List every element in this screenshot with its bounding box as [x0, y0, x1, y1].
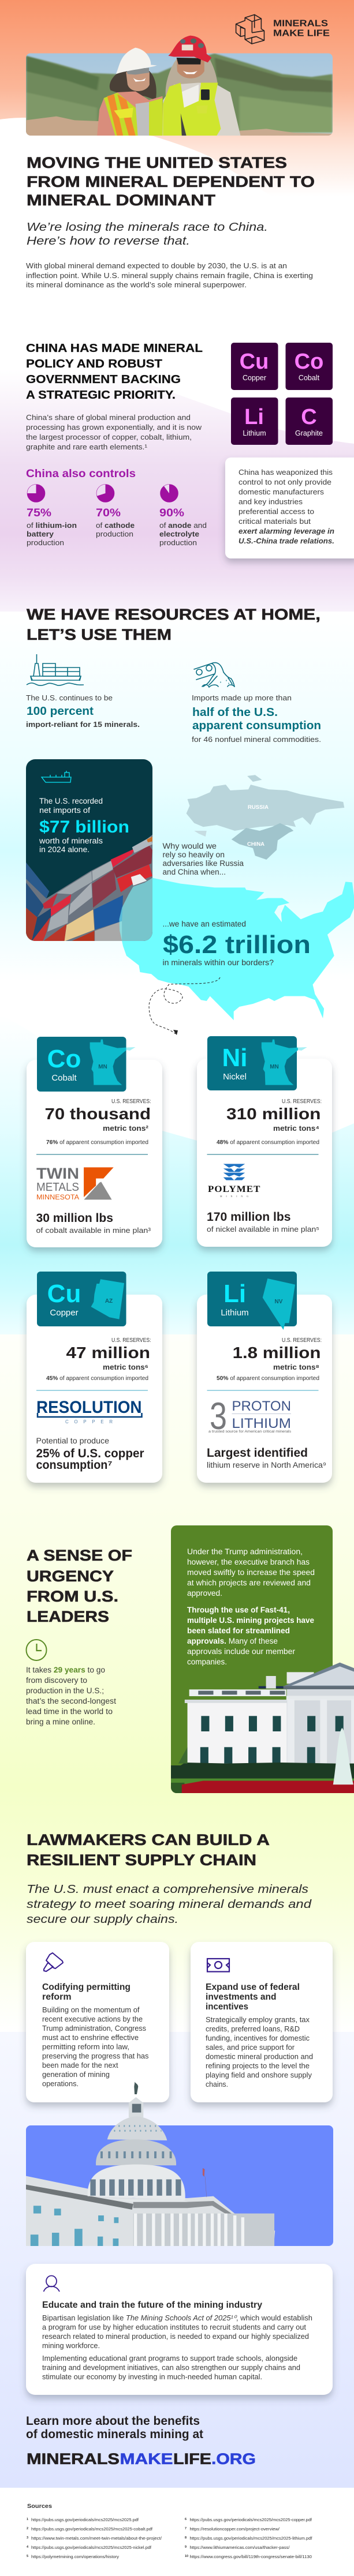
- badge: lithium Nevada: Lithium: [221, 1308, 249, 1318]
- title: FROM MINERAL DEPENDENT TO: [27, 173, 315, 190]
- sources list: left column: https://pubs.usgs.gov/periodicals/mcs2025/mcs2025-cobalt.pdf: [31, 2526, 153, 2532]
- stat: 100 percent import-reliant: [26, 693, 140, 729]
- stat: 90% anode and electrolyte: production: [159, 538, 197, 547]
- China body text: [26, 413, 202, 451]
- sources list: left column: https://www.twin-metals.com/meet-twin-metals/about-the-project/: [31, 2536, 162, 2541]
- title: [27, 154, 315, 209]
- card: codifying permitting reform: operations.: [42, 2080, 79, 2088]
- card: codifying permitting reform: Trump administration, Congress: [42, 2024, 146, 2033]
- map: Russia and China: [187, 775, 344, 860]
- reserves: 310 million metric tons: 48% of apparent consumption imported: [217, 1139, 319, 1146]
- stat: 70% cathode: production: [96, 530, 133, 538]
- intro text: inflection point. While U.S. mineral supply chains remain fragile, China is exerting: [26, 271, 313, 280]
- intro text: [26, 261, 313, 289]
- website URL: [27, 2450, 256, 2468]
- card: nickel: [197, 1036, 332, 1247]
- card: codifying permitting reform: preserving the progress that has: [42, 2052, 149, 2060]
- badge: copper Arizona: Cu: [47, 1280, 81, 1308]
- card: educate and train: stimulate our economy by investing in much-needed human capital.: [42, 2373, 262, 2381]
- text: 29 years to go from discovery to production: It takes 29 years to go: [26, 1666, 105, 1674]
- tile: graphite: C: [301, 405, 317, 429]
- reserves: 47 million metric tons: 47 million: [66, 1344, 150, 1362]
- card: cobalt: [27, 1037, 162, 1247]
- China body text: the largest processor of copper, cobalt, lithium,: [26, 433, 192, 441]
- logo: Twin Metals Minnesota: METALS: [36, 1181, 79, 1194]
- logo wordmark: MINERALS: [273, 18, 328, 29]
- badge: cobalt Minnesota: Cobalt: [51, 1073, 77, 1083]
- card: educate and train: a program for use by higher education institutes to recruit students and carry out: [42, 2323, 307, 2331]
- logo: PolyMet Mining: MINING: [220, 1195, 248, 1198]
- tile: copper: Cu: [240, 350, 269, 374]
- badge: nickel Minnesota: Nickel: [223, 1072, 247, 1082]
- reserves: 1.8 million metric tons: U.S. RESERVES:: [282, 1337, 322, 1344]
- heading: a sense of urgency: FROM U.S.: [27, 1588, 118, 1605]
- map: United States: [119, 878, 354, 1020]
- card: federal investments and incentives: sales, and price support for: [206, 2043, 295, 2052]
- text: why rely on adversaries: and China when...: [163, 868, 226, 876]
- sources list: left column: 4: [27, 2545, 29, 2549]
- pie chart 90%: [161, 485, 178, 503]
- text: 29 years to go from discovery to production: [26, 1666, 116, 1726]
- callout: China weaponized control: [225, 458, 354, 558]
- intro text: its mineral dominance as the world’s sole mineral superpower.: [26, 280, 247, 289]
- sources list: right column: 8: [185, 2536, 187, 2540]
- sources list: right column: [185, 2517, 312, 2559]
- map: China silhouette: [232, 823, 293, 860]
- reserves: 70 thousand metric tons: 70 thousand: [45, 1105, 151, 1123]
- sources list: right column: https://resolutioncopper.com/project-overview/: [189, 2526, 280, 2532]
- card: lithium: [197, 1272, 332, 1483]
- card: federal investments and incentives: credits, preferred loans, R&D: [206, 2025, 300, 2033]
- logo: PolyMet Mining: POLYMET: [208, 1184, 261, 1194]
- callout: China weaponized control: exert alarming leverage in: [239, 527, 334, 535]
- sources list: left column: https://polymetmining.com/operations/history: [31, 2554, 119, 2559]
- heading: resources at home: LET’S USE THEM: [27, 626, 172, 643]
- sources list: right column: 9: [185, 2545, 187, 2549]
- heading: a sense of urgency: [27, 1547, 132, 1625]
- stat: 100 percent import-reliant: import-reliant for 15 minerals.: [26, 720, 140, 729]
- icon: mining machine: [194, 663, 234, 687]
- stat: half of apparent consumption: [192, 693, 321, 744]
- logo: Twin Metals Minnesota: TWIN: [36, 1165, 79, 1182]
- subheading: comprehensive minerals strategy: [27, 1883, 312, 1926]
- blue panel: [26, 2125, 333, 2246]
- card: federal investments and incentives: investments and: [206, 1992, 276, 2002]
- image: U.S. Capitol: [26, 2082, 275, 2247]
- badge: nickel Minnesota: MN: [270, 1064, 279, 1070]
- subheading: comprehensive minerals strategy: The U.S. must enact a comprehensive minerals: [27, 1883, 308, 1896]
- tile: cobalt: [285, 343, 333, 390]
- green panel: Trump administration: however, the executive branch has: [187, 1558, 310, 1566]
- stat: $6.2 trillion: [163, 920, 311, 967]
- sources list: left column: [27, 2517, 162, 2559]
- stat: half of apparent consumption: apparent consumption: [192, 719, 321, 732]
- green panel: Trump administration: approved.: [187, 1589, 222, 1598]
- logo wordmark: [273, 18, 330, 38]
- reserves: 70 thousand metric tons: metric tons²: [103, 1124, 149, 1133]
- reserves: 47 million metric tons: metric tons⁶: [103, 1363, 148, 1371]
- badge: nickel Minnesota: [207, 1036, 307, 1090]
- green panel: Trump administration: multiple U.S. mining projects have: [187, 1616, 314, 1625]
- logo: Twin Metals Minnesota: [36, 1165, 114, 1201]
- stat: 25% of U.S. copper consumption: 25% of U.S. copper: [36, 1447, 144, 1460]
- sources list: left column: 3: [27, 2536, 28, 2540]
- sources list: right column: https://www.lithiumamericas.com/usa/thacker-pass/: [189, 2545, 290, 2550]
- stat: 25% of U.S. copper consumption: [36, 1436, 144, 1472]
- sources list: right column: https://pubs.usgs.gov/periodicals/mcs2025/mcs2025-lithium.pdf: [189, 2536, 312, 2541]
- China body text: processing has grown exponentially, and it is now: [26, 423, 202, 432]
- icon: banknote: [207, 1959, 229, 1972]
- tile: copper: Copper: [243, 374, 266, 382]
- map: Russia and China: RUSSIA: [248, 804, 269, 811]
- stat: 70% cathode: of cathode: [96, 521, 135, 530]
- logo: Minerals Make Life: [236, 14, 330, 44]
- reserves: 310 million metric tons: 310 million: [226, 1105, 321, 1123]
- stat: $6.2 trillion: ...we have an estimated: [163, 920, 246, 928]
- sources list: left column: 1: [27, 2518, 28, 2521]
- icon: person: [44, 2275, 59, 2292]
- badge: cobalt Minnesota: MN: [98, 1064, 107, 1070]
- tile: lithium: Lithium: [243, 429, 266, 437]
- badge: copper Arizona: [37, 1272, 126, 1326]
- heading: lawmakers: RESILIENT SUPPLY CHAIN: [27, 1851, 256, 1869]
- logo: Twin Metals Minnesota: MINNESOTA: [36, 1193, 79, 1201]
- text: 29 years to go from discovery to production: from discovery to: [26, 1676, 87, 1685]
- map: Russia and China: CHINA: [247, 841, 264, 848]
- card: educate and train: training and development initiatives, can also strengthen our supply chains and: [42, 2364, 300, 2372]
- reserves: 310 million metric tons: [217, 1098, 322, 1146]
- title: MINERAL DOMINANT: [27, 192, 216, 209]
- logo: 3 Proton Lithium: a trusted source for American critical minerals: [208, 1430, 292, 1434]
- stat: 70% cathode: 70%: [96, 507, 121, 519]
- card: federal investments and incentives: playing field and onshore supply: [206, 2071, 312, 2079]
- heading: resources at home: [27, 606, 321, 643]
- subtitle: Here’s how to reverse that.: [27, 235, 190, 248]
- green panel: Trump administration: approvals. Many of these: [187, 1637, 278, 1645]
- stat: 170 million lbs nickel: 170 million lbs: [207, 1210, 291, 1224]
- sources list: right column: https://pubs.usgs.gov/periodicals/mcs2025/mcs2025-copper.pdf: [189, 2517, 312, 2522]
- callout: China weaponized control: preferential access to: [239, 507, 314, 516]
- stat: largest identified lithium reserve: lithium reserve in North America⁹: [207, 1461, 326, 1469]
- badge: cobalt Minnesota: [37, 1037, 136, 1092]
- heading: a sense of urgency: A SENSE OF: [27, 1547, 132, 1564]
- callout: China weaponized control: and key industries: [239, 497, 303, 506]
- card: federal investments and incentives: Strategically employ grants, tax: [206, 2016, 310, 2024]
- tile: copper: [231, 343, 278, 390]
- card: federal investments and incentives: [191, 1942, 333, 2102]
- text: 29 years to go from discovery to production: that’s the second-longest: [26, 1697, 116, 1705]
- logo: 3 Proton Lithium: [208, 1394, 292, 1437]
- heading: China: A STRATEGIC PRIORITY.: [26, 389, 176, 402]
- badge: copper Arizona: AZ: [105, 1298, 113, 1304]
- callout: China weaponized control: U.S.-China trade relations.: [239, 537, 334, 545]
- White House hedge and flowers: [171, 1728, 354, 1793]
- tile: lithium: Li: [244, 405, 264, 429]
- card: codifying permitting reform: [26, 1942, 169, 2102]
- badge: nickel Minnesota: Ni: [222, 1044, 247, 1072]
- sources list: left column: https://pubs.usgs.gov/periodicals/mcs2025/mcs2025.pdf: [31, 2517, 139, 2522]
- reserves: 310 million metric tons: metric tons⁴: [273, 1124, 319, 1133]
- heading: China: CHINA HAS MADE MINERAL: [26, 342, 203, 355]
- sources list: right column: 10: [185, 2555, 188, 2558]
- heading: China: [26, 342, 203, 402]
- badge: lithium Nevada: Li: [223, 1280, 246, 1308]
- card: educate and train: Educate and train the future of the mining industry: [42, 2300, 262, 2310]
- pie chart 70%: [96, 485, 114, 502]
- stat: largest identified lithium reserve: Largest identified: [207, 1446, 308, 1460]
- green panel: Trump administration: Through the use of Fast-41,: [187, 1606, 290, 1614]
- text: 29 years to go from discovery to production: bring a mine online.: [26, 1718, 95, 1726]
- tile: lithium: [231, 398, 278, 445]
- stat: largest identified lithium reserve: [207, 1446, 326, 1469]
- White House windows: [200, 1716, 344, 1764]
- stat: half of apparent consumption: for 46 nonfuel mineral commodities.: [192, 735, 321, 744]
- stat: 75% lithium-ion: battery: [27, 530, 54, 538]
- White House columns: [287, 1699, 354, 1764]
- logo: PolyMet Mining: [208, 1164, 261, 1198]
- logo: 3 Proton Lithium: 3: [210, 1394, 227, 1437]
- intro text: With global mineral demand expected to double by 2030, the U.S. is at an: [26, 261, 287, 270]
- heading: China: POLICY AND ROBUST: [26, 358, 162, 370]
- hero photo: two miners in hard hats: [26, 36, 333, 136]
- card: copper: [27, 1272, 162, 1483]
- card: educate and train: research related to mineral production, is needed to expand our highly specialized: [42, 2333, 309, 2341]
- card: federal investments and incentives: funding, incentives for domestic: [206, 2034, 310, 2042]
- icon: gavel: [44, 1953, 63, 1971]
- stat: 30 million lbs cobalt: [36, 1212, 151, 1235]
- Capitol dome: [88, 2082, 188, 2202]
- White House roofline: [189, 1672, 314, 1696]
- sources list: left column: 5: [27, 2555, 28, 2558]
- tile: graphite: [285, 398, 333, 445]
- green panel: Trump administration: been slated for streamlined: [187, 1626, 290, 1635]
- stat: 90% anode and electrolyte: [159, 485, 207, 547]
- green panel: Trump administration: moved swiftly to increase the speed: [187, 1568, 315, 1577]
- dark card: $77 billion net imports: in 2024 alone.: [39, 845, 90, 854]
- card: codifying permitting reform: permitting reform into law,: [42, 2043, 129, 2051]
- icon: cargo ship: [42, 771, 71, 782]
- tile: cobalt: Co: [295, 350, 323, 374]
- stat: 100 percent import-reliant: 100 percent: [27, 705, 94, 718]
- call to action: [26, 2414, 203, 2441]
- reserves: 70 thousand metric tons: [45, 1098, 151, 1146]
- stat: 25% of U.S. copper consumption: Potential to produce: [36, 1436, 109, 1445]
- miner: woman in white hard hat: [97, 48, 163, 136]
- tile: cobalt: Cobalt: [299, 374, 320, 382]
- reserves: 47 million metric tons: 45% of apparent consumption imported: [46, 1375, 148, 1382]
- heading: lawmakers: [27, 1831, 270, 1869]
- text: why rely on adversaries: Why would we: [163, 842, 217, 850]
- stat: half of apparent consumption: half of the U.S.: [192, 706, 278, 719]
- sources: [27, 2503, 312, 2559]
- sources: Sources: [27, 2503, 52, 2510]
- Capitol wings: [26, 2176, 275, 2247]
- card: codifying permitting reform: must act to enshrine effective: [42, 2034, 139, 2042]
- green panel: Trump administration: approvals include our member: [187, 1647, 296, 1656]
- card: educate and train: Implementing educational grant programs to support trade schools, alongside: [42, 2354, 297, 2363]
- reserves: 70 thousand metric tons: 76% of apparent consumption imported: [46, 1139, 148, 1146]
- subtitle: We’re losing the minerals race to China.: [27, 221, 268, 234]
- callout: China weaponized control: domestic manufacturers: [239, 488, 325, 496]
- reserves: 47 million metric tons: [46, 1337, 151, 1382]
- badge: cobalt Minnesota: Co: [47, 1045, 81, 1073]
- sources list: right column: https://www.congress.gov/bill/119th-congress/senate-bill/1130: [189, 2554, 312, 2559]
- stat: $6.2 trillion: $6.2 trillion: [163, 931, 311, 959]
- website URL: LIFE: [173, 2450, 211, 2468]
- logo: Resolution Copper: [36, 1398, 142, 1424]
- badge: lithium Nevada: NV: [275, 1299, 283, 1305]
- tile: graphite: Graphite: [295, 429, 323, 437]
- callout: China weaponized control: China has weaponized this: [239, 468, 333, 477]
- heading: lawmakers: LAWMAKERS CAN BUILD A: [27, 1831, 270, 1848]
- subheading: comprehensive minerals strategy: strategy to meet soaring mineral demands and: [27, 1898, 312, 1911]
- reserves: 1.8 million metric tons: metric tons⁸: [273, 1363, 319, 1371]
- badge: copper Arizona: Copper: [50, 1308, 79, 1318]
- logo: Resolution Copper: RESOLUTION: [36, 1398, 142, 1417]
- card: codifying permitting reform: been made for the next: [42, 2061, 118, 2069]
- stat: 30 million lbs cobalt: 30 million lbs: [36, 1212, 113, 1225]
- callout: China weaponized control: control to not only provide: [239, 478, 331, 486]
- reserves: 1.8 million metric tons: 50% of apparent consumption imported: [217, 1375, 319, 1382]
- map: Russia silhouette: [187, 775, 344, 837]
- dark card: $77 billion net imports: $77 billion: [39, 818, 129, 837]
- stat: 70% cathode: [96, 485, 135, 538]
- text: why rely on adversaries: rely so heavily on: [163, 850, 225, 859]
- stat: 170 million lbs nickel: of nickel available in mine plan⁵: [207, 1225, 319, 1233]
- badge: lithium Nevada: [207, 1272, 297, 1330]
- reserves: 1.8 million metric tons: 1.8 million: [233, 1344, 321, 1362]
- text: 29 years to go from discovery to production: production in the U.S.;: [26, 1686, 104, 1695]
- text: why rely on adversaries: [163, 842, 244, 876]
- card: educate and train: [26, 2264, 333, 2395]
- green panel: Trump administration: at which projects are reviewed and: [187, 1578, 311, 1587]
- heading: a sense of urgency: LEADERS: [27, 1608, 109, 1625]
- green panel: Trump administration: companies.: [187, 1658, 227, 1666]
- logo: 3 Proton Lithium: PROTON: [232, 1398, 291, 1414]
- stat: 100 percent import-reliant: The U.S. continues to be: [26, 693, 113, 702]
- card: federal investments and incentives: chains.: [206, 2080, 228, 2088]
- dark card: $77 billion net imports: worth of minerals: [39, 837, 103, 845]
- card: federal investments and incentives: Expand use of federal: [206, 1982, 300, 1992]
- website URL: MAKE: [120, 2450, 173, 2468]
- subtitle: [27, 221, 268, 248]
- heading: resources at home: WE HAVE RESOURCES AT HOME,: [27, 606, 321, 623]
- title: MOVING THE UNITED STATES: [27, 154, 287, 171]
- China body text: graphite and rare earth elements.¹: [26, 443, 148, 451]
- reserves: 310 million metric tons: U.S. RESERVES:: [282, 1098, 322, 1105]
- reserves: 47 million metric tons: U.S. RESERVES:: [111, 1337, 151, 1344]
- element tiles: [231, 343, 333, 445]
- sources list: left column: https://pubs.usgs.gov/periodicals/mcs2025/mcs2025-nickel.pdf: [31, 2545, 152, 2550]
- image: shipping containers: [26, 834, 152, 941]
- card: codifying permitting reform: generation of mining: [42, 2071, 110, 2079]
- subheading: comprehensive minerals strategy: secure our supply chains.: [27, 1913, 178, 1926]
- heading: China also controls: China also controls: [26, 468, 136, 480]
- heading: a sense of urgency: URGENCY: [27, 1568, 114, 1585]
- sources list: left column: 2: [27, 2527, 28, 2530]
- callout: China weaponized control: critical materials but: [239, 517, 311, 526]
- sources list: right column: 7: [185, 2527, 187, 2530]
- miner: man in red hard hat: [163, 36, 240, 136]
- card: educate and train: mining workforce.: [42, 2342, 100, 2350]
- card: educate and train: Bipartisan legislation like The Mining Schools Act of 2025¹⁰ , which would establish: [42, 2314, 312, 2322]
- pie chart 75%: [27, 485, 45, 502]
- call to action: Learn more about the benefits: [26, 2414, 200, 2428]
- stat: 75% lithium-ion: 75%: [27, 507, 51, 519]
- stat: 170 million lbs nickel: [207, 1210, 319, 1233]
- dark card: $77 billion net imports: The U.S. recorded: [39, 797, 103, 805]
- logo: 3 Proton Lithium: LITHIUM: [232, 1416, 291, 1431]
- reserves: 1.8 million metric tons: [217, 1337, 322, 1382]
- sources list: right column: 6: [185, 2518, 187, 2521]
- stat: 25% of U.S. copper consumption: consumption⁷: [36, 1458, 112, 1472]
- stat: 75% lithium-ion: of lithium-ion: [27, 521, 77, 530]
- text: 29 years to go from discovery to production: lead time in the world to: [26, 1707, 113, 1716]
- Capitol flag: [203, 2168, 207, 2197]
- card: federal investments and incentives: incentives: [206, 2002, 248, 2012]
- dark card: $77 billion net imports: net imports of: [39, 806, 90, 815]
- text: why rely on adversaries: adversaries like Russia: [163, 859, 244, 868]
- green panel: Trump administration: Under the Trump administration,: [187, 1547, 303, 1556]
- call to action: of domestic minerals mining at: [26, 2428, 203, 2441]
- stat: 90% anode and electrolyte: of anode and: [159, 521, 207, 530]
- card: codifying permitting reform: Building on the momentum of: [42, 2006, 140, 2014]
- icon: clock: [27, 1640, 46, 1660]
- heading: China: GOVERNMENT BACKING: [26, 373, 181, 386]
- arrow: dashed looping arrow: [149, 977, 220, 1035]
- stat: 75% lithium-ion: [27, 485, 77, 547]
- card: federal investments and incentives: refining projects to the level the: [206, 2062, 310, 2070]
- website URL: .ORG: [211, 2450, 256, 2468]
- website URL: MINERALS: [27, 2450, 120, 2468]
- green panel: Trump administration: [171, 1525, 333, 1793]
- card: codifying permitting reform: reform: [42, 1992, 72, 2002]
- card: codifying permitting reform: recent executive actions by the: [42, 2015, 143, 2023]
- dark card: $77 billion net imports: [26, 759, 152, 941]
- card: federal investments and incentives: domestic mineral production and: [206, 2053, 313, 2061]
- card: codifying permitting reform: Codifying permitting: [42, 1982, 131, 1992]
- stat: 90% anode and electrolyte: electrolyte: [159, 530, 199, 538]
- stat: 75% lithium-ion: production: [27, 538, 64, 547]
- icon: container ship: [27, 654, 84, 685]
- stat: 90% anode and electrolyte: 90%: [159, 507, 184, 519]
- China body text: China’s share of global mineral production and: [26, 413, 191, 422]
- stat: half of apparent consumption: Imports made up more than: [192, 693, 292, 702]
- stat: $6.2 trillion: in minerals within our borders?: [163, 958, 274, 967]
- logo wordmark: MAKE LIFE: [273, 29, 330, 38]
- White House walls: [185, 1663, 354, 1764]
- stat: 30 million lbs cobalt: of cobalt available in mine plan³: [36, 1226, 151, 1235]
- logo: Resolution Copper: COPPER: [65, 1419, 113, 1424]
- image: White House: [171, 1663, 354, 1793]
- icon: stacked cubes: [236, 14, 264, 44]
- reserves: 70 thousand metric tons: U.S. RESERVES:: [111, 1098, 151, 1105]
